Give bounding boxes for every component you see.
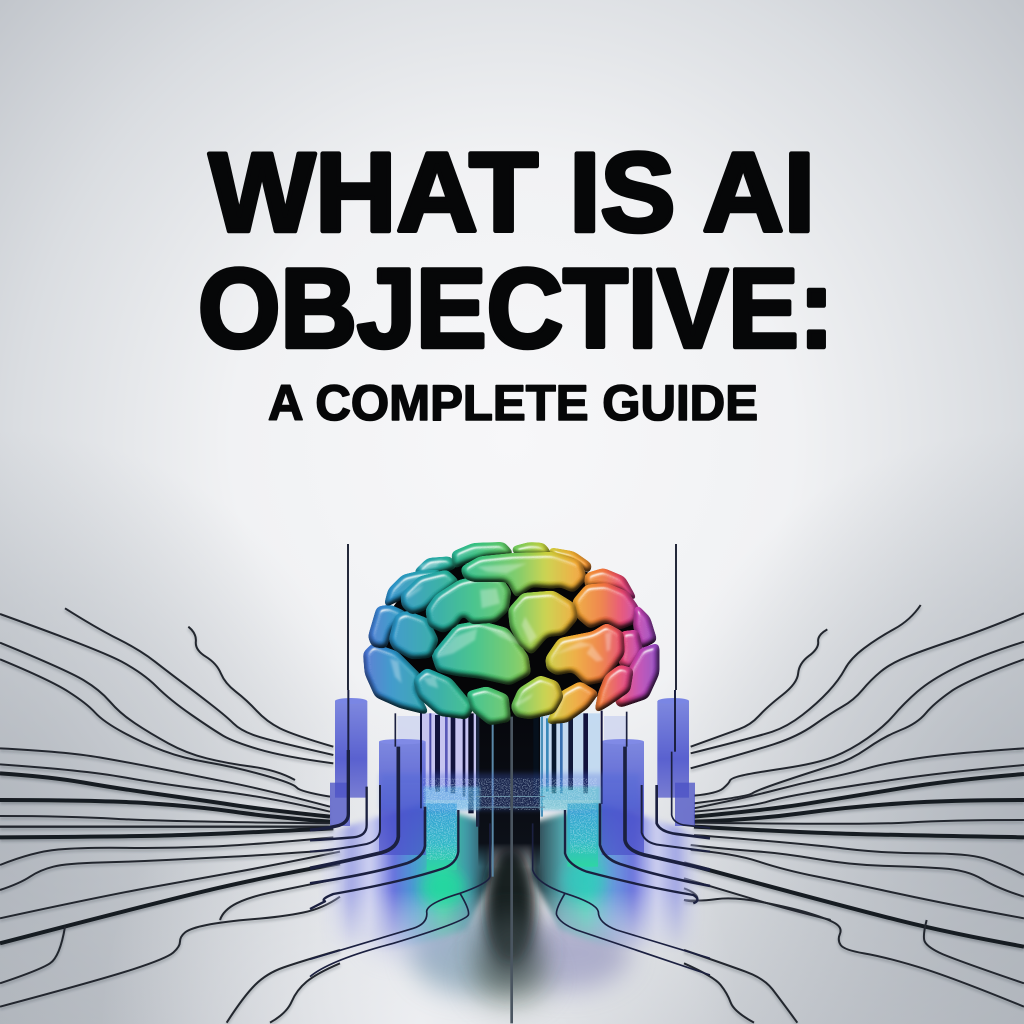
right wires	[684, 605, 1024, 1023]
vertical bars	[420, 711, 603, 877]
heading line 2: OBJECTIVE:	[198, 245, 834, 371]
brain highlights	[390, 558, 612, 707]
centre line	[510, 717, 513, 1023]
central column structure	[310, 690, 710, 1023]
brain dark base	[383, 558, 643, 715]
right wide cylinder	[601, 739, 644, 855]
short poles	[348, 690, 675, 752]
central dark core	[478, 710, 540, 867]
right circuit wires	[533, 747, 710, 975]
title	[198, 129, 834, 431]
subtitle: A COMPLETE GUIDE	[268, 375, 758, 431]
heading line 1: WHAT IS AI	[209, 129, 815, 255]
brain	[365, 544, 657, 723]
glowing column left	[427, 803, 457, 870]
left base block	[330, 783, 350, 826]
left circuit wires	[310, 747, 490, 977]
glowing column right	[567, 803, 598, 867]
right tall cylinder	[657, 698, 689, 798]
left wires	[0, 608, 340, 1023]
tall pole left	[347, 544, 349, 690]
back cylinders	[397, 713, 626, 800]
right base block	[675, 783, 695, 826]
left wide cylinder	[379, 739, 426, 855]
left tall cylinder	[335, 698, 367, 798]
water disc	[380, 773, 640, 860]
floor glow	[323, 803, 700, 1007]
tall pole right	[675, 544, 677, 690]
